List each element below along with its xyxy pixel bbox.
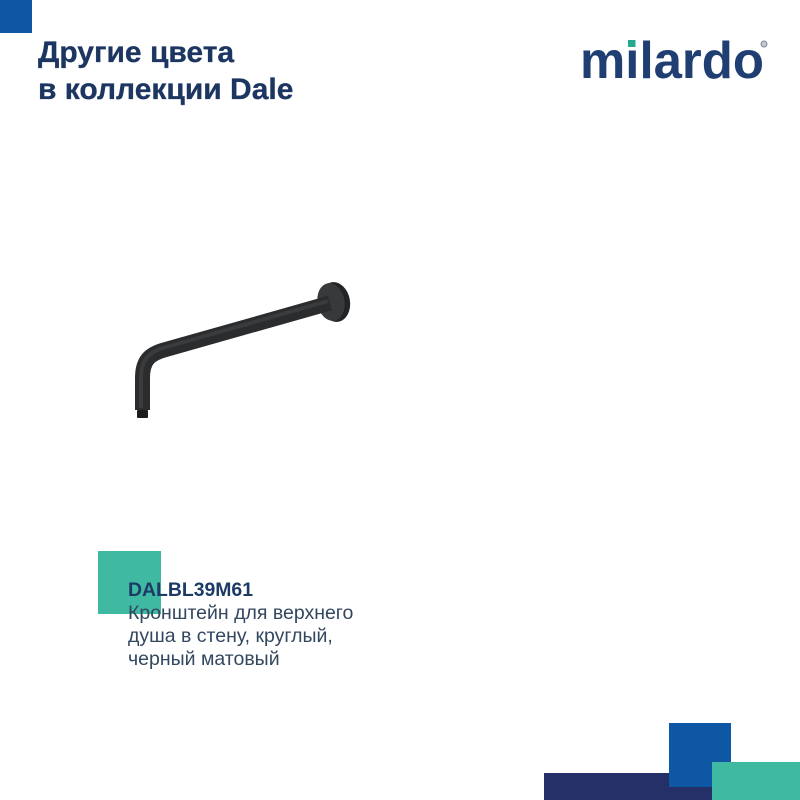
title bbox=[38, 36, 293, 106]
title: Другие цвета bbox=[38, 36, 234, 69]
wall flange bbox=[317, 280, 353, 324]
decor: bottom-right blocks bbox=[544, 723, 800, 800]
product description: черный матовый bbox=[128, 648, 280, 670]
product description: Кронштейн для верхнего bbox=[128, 602, 353, 624]
product code: DALBL39M61 bbox=[128, 579, 253, 601]
product description: душа в стену, круглый, bbox=[128, 625, 333, 647]
arm bbox=[142, 303, 330, 410]
product description bbox=[128, 602, 353, 670]
decor: top-left blue square bbox=[0, 0, 32, 33]
product image: black shower arm bbox=[135, 282, 350, 418]
logo: milardo: milardo bbox=[580, 32, 764, 90]
title: в коллекции Dale bbox=[38, 73, 293, 106]
decor: teal square behind product text bbox=[98, 551, 161, 614]
thread tip bbox=[137, 410, 148, 418]
